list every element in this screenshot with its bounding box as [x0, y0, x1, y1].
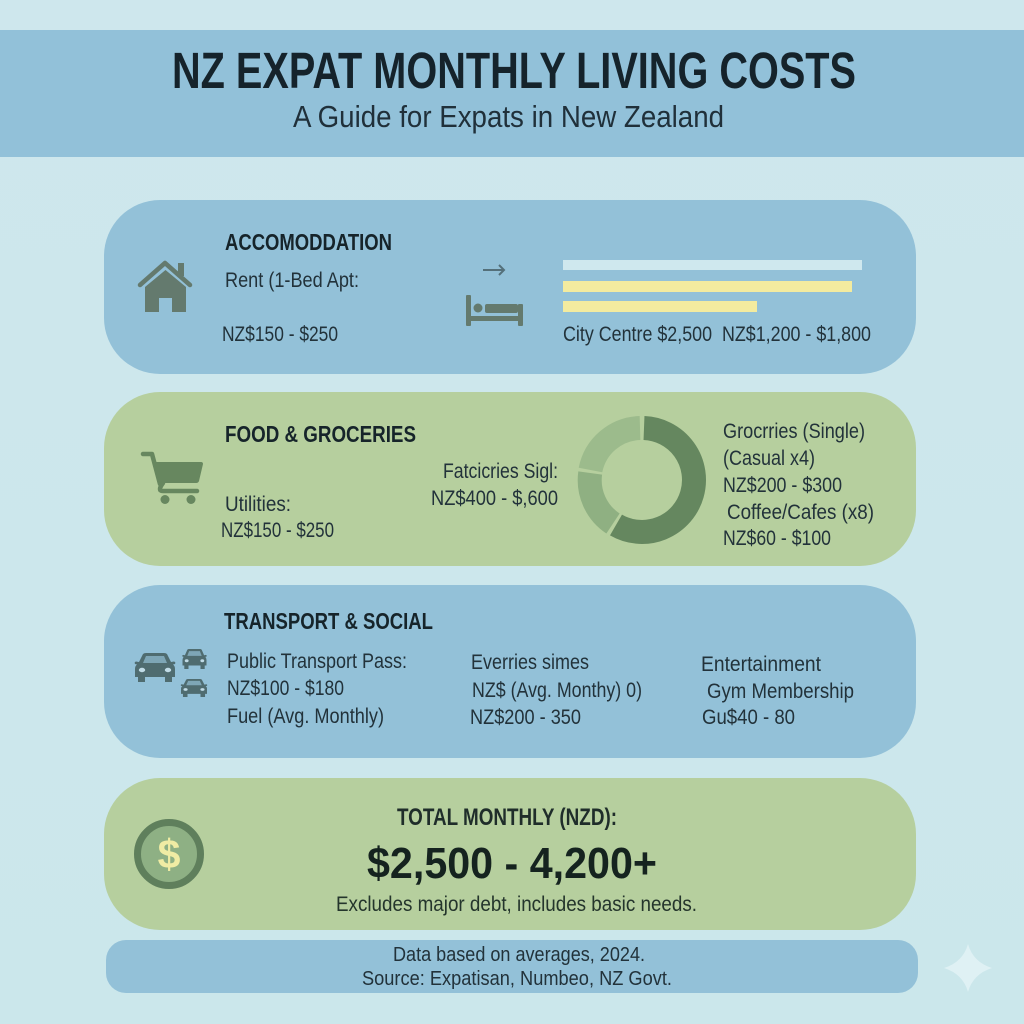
footer source bar: Source: Expatisan, Numbeo, NZ Govt. [362, 968, 672, 990]
food price list: (Casual x4) [723, 447, 815, 470]
total note: Excludes major debt, includes basic needs. [336, 892, 697, 916]
entertainment list: Entertainment [701, 653, 821, 676]
icon: shopping cart [143, 454, 203, 504]
heading: accommodation: ACCOMODDATION [225, 229, 392, 255]
social list: NZ$ (Avg. Monthy) 0) [472, 679, 642, 702]
icon: dollar coin [138, 822, 200, 886]
food price list: Coffee/Cafes (x8) [727, 501, 874, 524]
donut chart [590, 428, 694, 532]
icon: sparkle [944, 944, 992, 992]
entertainment list: Gym Membership [707, 680, 854, 703]
entertainment list: Gu$40 - 80 [702, 706, 795, 729]
groceries label: Fatcicries Sigl: [443, 460, 558, 483]
social list: Everries simes [471, 651, 589, 674]
panel: food and groceries [104, 392, 916, 566]
panel: transport and social [104, 585, 916, 758]
panel: total monthly [104, 778, 916, 930]
food price list: Grocrries (Single) [723, 420, 865, 443]
footer source bar: Data based on averages, 2024. [393, 944, 645, 966]
icon: house [140, 263, 190, 312]
total value: $2,500 - 4,200+ [367, 839, 657, 888]
icon: arrow [483, 265, 504, 275]
transport list: Public Transport Pass: [227, 650, 407, 673]
social list [470, 651, 642, 729]
transport list [227, 650, 407, 728]
entertainment list [701, 653, 854, 729]
subtitle: A Guide for Expats in New Zealand [293, 99, 724, 134]
food price list: NZ$60 - $100 [723, 527, 831, 550]
groceries value: NZ$400 - $,600 [431, 487, 558, 510]
total label: TOTAL MONTHLY (NZD): [397, 804, 617, 831]
icon: bed [466, 295, 523, 326]
panel: accommodation [104, 200, 916, 374]
header banner [0, 30, 1024, 157]
social list: NZ$200 - 350 [470, 706, 581, 729]
icon: cars [135, 649, 207, 697]
bar chart labels: City Centre $2,500 NZ$1,200 - $1,800 [563, 323, 871, 346]
bar chart: rent ranges [563, 260, 862, 312]
heading: food and groceries: FOOD & GROCERIES [225, 421, 416, 447]
food price list: NZ$200 - $300 [723, 474, 842, 497]
transport list: Fuel (Avg. Monthly) [227, 705, 384, 728]
food price list [723, 420, 874, 550]
rent value: NZ$150 - $250 [222, 323, 338, 346]
utilities value: NZ$150 - $250 [221, 519, 334, 542]
transport list: NZ$100 - $180 [227, 677, 344, 700]
icon: dollar coin: $ [158, 831, 181, 877]
footer source bar [106, 940, 918, 993]
utilities label: Utilities: [225, 493, 291, 516]
rent label: Rent (1-Bed Apt: [225, 269, 359, 292]
heading: transport and social: TRANSPORT & SOCIAL [224, 608, 433, 634]
